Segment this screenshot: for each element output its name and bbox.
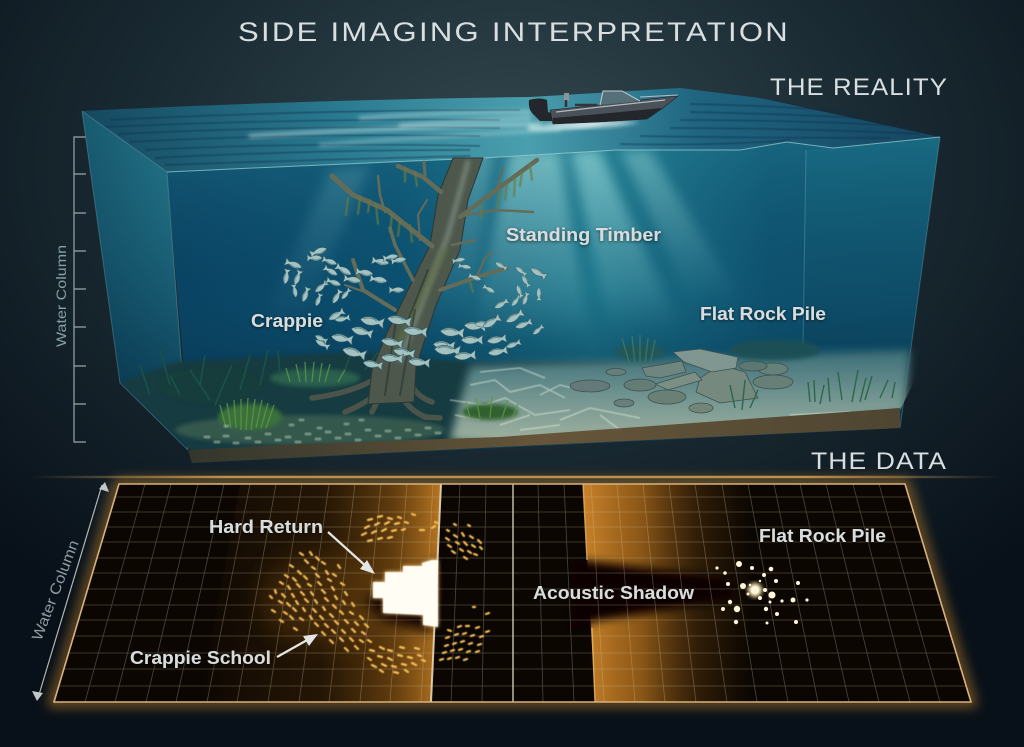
panel: sonar data	[50, 484, 975, 702]
trunk	[368, 158, 483, 404]
arrow: hard return	[328, 532, 375, 574]
water column scale	[53, 137, 86, 442]
windshield and seat	[600, 91, 640, 105]
label: water column (sonar): Water Column	[29, 538, 83, 643]
crappie school returns	[270, 514, 489, 673]
label: water column (scale): Water Column	[53, 245, 69, 347]
centre track lines	[431, 484, 441, 702]
waterline	[167, 137, 940, 172]
left return band	[230, 484, 441, 702]
water column double arrow	[32, 482, 109, 701]
hull	[550, 96, 678, 124]
tank left side glass	[82, 111, 188, 450]
label: acoustic shadow: Acoustic Shadow	[533, 583, 695, 603]
roots	[312, 372, 440, 418]
floor	[120, 348, 910, 452]
label: flat rock pile (data): Flat Rock Pile	[759, 526, 886, 546]
standing timber tree	[312, 158, 537, 418]
hard-return shadow	[365, 560, 445, 632]
label: crappie: Crappie	[251, 311, 323, 331]
glass edges	[82, 111, 940, 450]
panel glow	[54, 484, 971, 702]
label: hard return: Hard Return	[209, 517, 323, 537]
acoustic shadow	[570, 558, 735, 632]
outboard motor	[529, 98, 555, 121]
flat rock pile	[570, 349, 793, 413]
hard return block	[373, 560, 438, 627]
sand bed	[450, 350, 910, 445]
boat wake spray	[540, 118, 640, 128]
glow divider	[30, 476, 1000, 478]
heading: the reality: THE REALITY	[770, 74, 948, 101]
panel border	[54, 484, 971, 702]
label: standing timber: Standing Timber	[506, 225, 661, 245]
surface ripples	[105, 104, 920, 165]
water surface	[82, 88, 940, 172]
sand caustics	[450, 368, 850, 430]
heading: the data: THE DATA	[811, 448, 947, 475]
title: SIDE IMAGING INTERPRETATION	[238, 17, 790, 47]
arrow: crappie school	[277, 634, 318, 657]
sonar base	[54, 484, 971, 702]
panel: the reality water tank	[82, 88, 940, 463]
tank front water	[167, 137, 940, 463]
boat wake	[250, 112, 600, 145]
label: crappie school: Crappie School	[130, 648, 271, 668]
grid	[50, 484, 975, 702]
gravel and weeds left	[140, 348, 518, 445]
crappie school fish	[281, 245, 548, 370]
label: flat rock pile (reality): Flat Rock Pile	[700, 304, 826, 324]
speedboat	[529, 91, 678, 128]
right return band	[583, 484, 738, 702]
weeds right	[615, 335, 895, 410]
rock pile return	[715, 561, 809, 624]
right side pane	[803, 137, 940, 350]
hanging moss	[346, 165, 532, 292]
soil front	[188, 408, 900, 463]
school haze	[260, 555, 400, 645]
light rays	[292, 150, 719, 323]
